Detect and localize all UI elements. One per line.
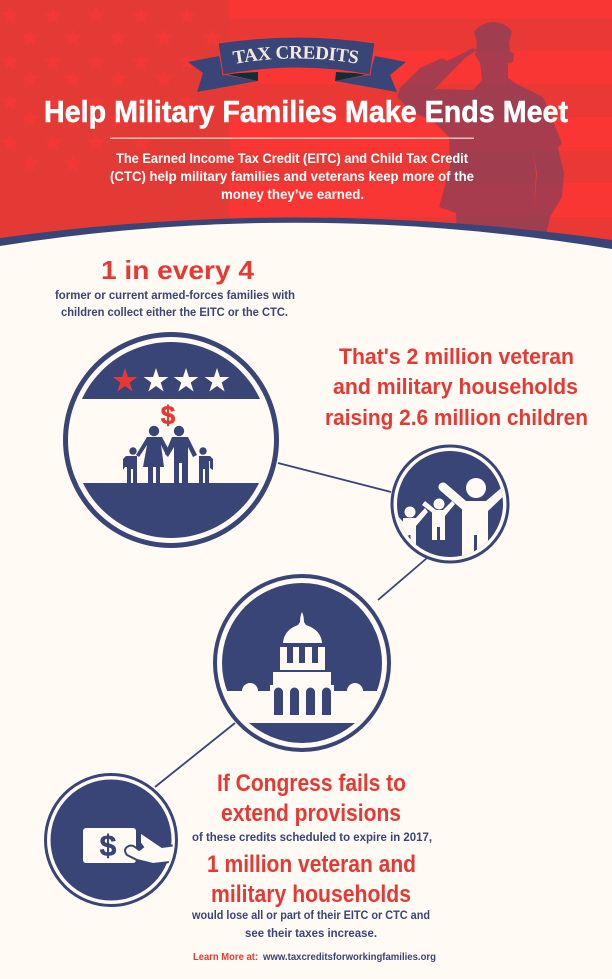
flag canton with stars	[0, 0, 229, 255]
learn more link: www.taxcreditsforworkingfamilies.org	[262, 952, 436, 963]
stat: 2 million households: That's 2 million veteran	[339, 344, 574, 369]
stars row	[113, 368, 229, 392]
title: Help Military Families Make Ends Meet	[44, 95, 568, 129]
stat: 1 in every 4: former or current armed-forces families with	[55, 290, 295, 302]
stat: 1 in every 4	[55, 255, 295, 319]
saluting soldier silhouette	[397, 22, 564, 240]
stat: 2 million households: raising 2.6 million children	[325, 405, 588, 430]
learn more link: Learn More at:	[193, 952, 258, 963]
stat: congress text: military households	[211, 881, 411, 908]
intro text: (CTC) help military families and veterans keep more of the	[110, 169, 474, 184]
stat: congress text: If Congress fails to	[217, 770, 406, 797]
intro text: The Earned Income Tax Credit (EITC) and Child Tax Credit	[116, 151, 468, 166]
stat: congress text: extend provisions	[221, 800, 401, 827]
stat: congress text: 1 million veteran and	[207, 851, 416, 878]
learn more link	[193, 952, 436, 963]
connector lines	[155, 463, 427, 787]
curved header edge	[0, 217, 612, 979]
stat: 2 million households: and military households	[333, 374, 578, 399]
intro text: money they’ve earned.	[221, 187, 364, 202]
stat: 1 in every 4: children collect either the EITC or the CTC.	[61, 307, 288, 319]
stat: 2 million households	[325, 344, 588, 430]
icon: children circle	[392, 446, 510, 562]
icon: money in hand circle	[46, 774, 176, 906]
family figures	[123, 426, 213, 484]
dollar sign: $	[161, 400, 176, 430]
intro text	[110, 151, 474, 202]
stat: congress text: would lose all or part of their EITC or CTC and	[191, 908, 430, 922]
stat: congress text: see their taxes increase.	[245, 926, 377, 940]
stat: congress text	[191, 770, 432, 940]
divider	[110, 138, 474, 139]
icon: money in hand circle: $	[100, 830, 117, 863]
icon: family circle	[60, 330, 280, 553]
ribbon: tax credits	[188, 36, 406, 92]
header banner	[0, 0, 612, 255]
stat: congress text: of these credits scheduled to expire in 2017,	[192, 830, 432, 844]
icon: capitol circle	[210, 575, 395, 750]
stat: 1 in every 4: 1 in every 4	[101, 255, 255, 285]
ribbon: tax credits: TAX CREDITS	[232, 46, 358, 64]
